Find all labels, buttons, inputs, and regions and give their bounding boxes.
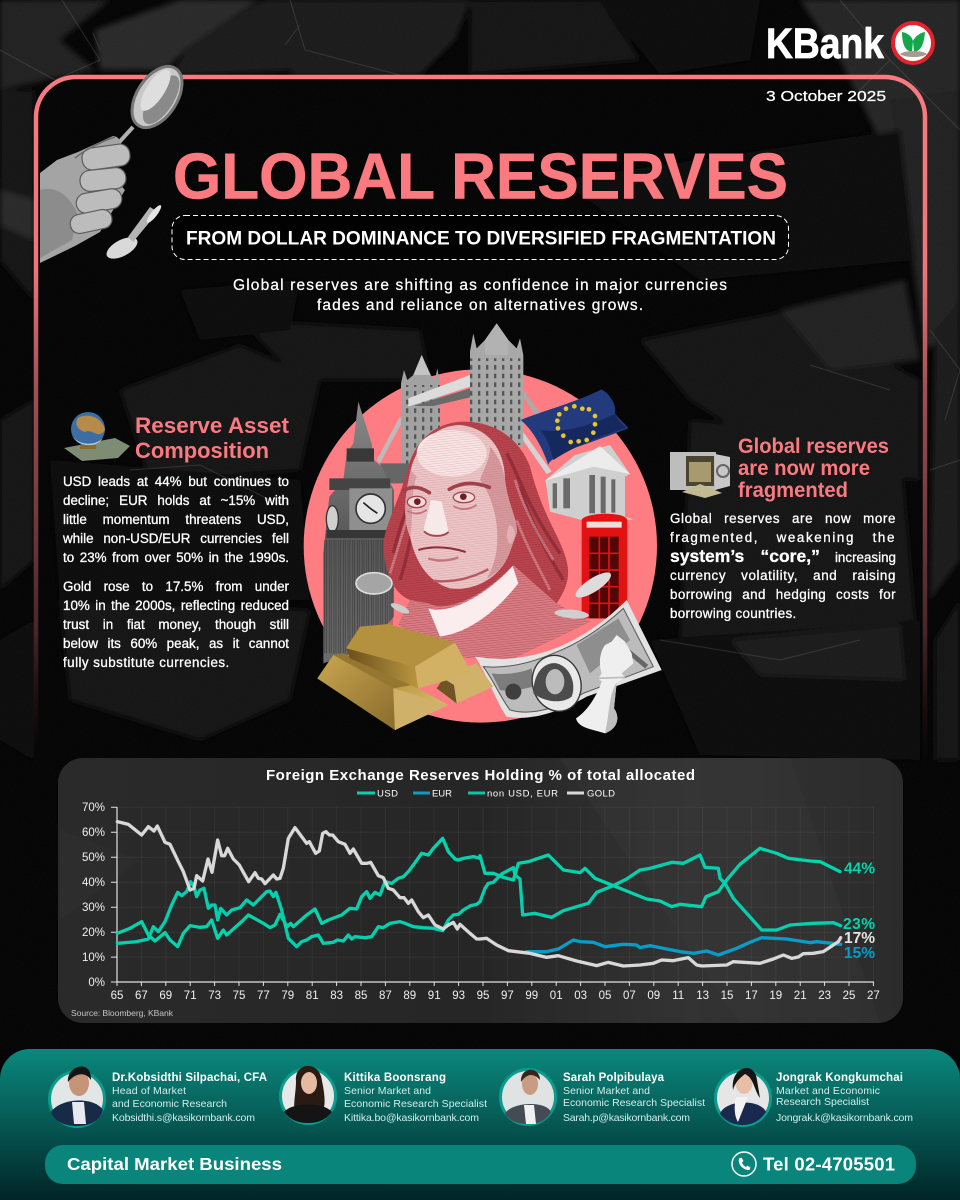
x-axis labels: 93 <box>452 990 465 1002</box>
legend <box>357 788 615 800</box>
x-axis labels: 11 <box>672 990 684 1002</box>
x-axis labels: 15 <box>721 990 733 1002</box>
heading: Reserve Asset Composition <box>135 413 290 463</box>
illustration: central collage <box>304 323 662 733</box>
text block: global reserves fragmented: currency volatility, and raising <box>670 568 896 582</box>
text: Jongrak: Market and Economic <box>776 1085 880 1097</box>
chess king piece <box>576 635 633 733</box>
heading: Global reserves are now more fragmented: fragmented <box>738 478 848 502</box>
x-axis labels: 23 <box>818 990 831 1002</box>
end labels: 17% <box>844 930 875 947</box>
portrait: Sarah <box>500 1070 556 1124</box>
date: 3 October 2025 <box>766 88 886 105</box>
text: Kittika: Economic Research Specialist <box>344 1098 487 1110</box>
x-axis labels: 97 <box>501 990 514 1002</box>
text: Kittika <box>344 1072 487 1124</box>
y-axis labels: 10% <box>82 952 105 964</box>
text: Kittika: Senior Market and <box>344 1085 431 1097</box>
x-axis labels: 13 <box>696 990 709 1002</box>
icon: KBank leaf emblem <box>893 23 933 63</box>
text block: global reserves fragmented: fragmented, weakening the <box>670 530 896 544</box>
portrait: Kittika <box>280 1066 336 1124</box>
intro text: Global reserves are shifting as confidence in major currencies <box>233 277 727 294</box>
title: GLOBAL RESERVES <box>173 140 788 212</box>
x-axis labels: 89 <box>403 990 416 1002</box>
y-axis labels: 0% <box>88 977 105 989</box>
contact bar <box>45 1145 916 1184</box>
heading: Reserve Asset Composition: Reserve Asset <box>135 413 290 438</box>
y-axis labels: 70% <box>82 802 105 814</box>
Big Ben <box>323 402 394 663</box>
x-axis labels: 19 <box>769 990 782 1002</box>
legend: GOLD <box>587 788 615 800</box>
x-axis labels: 03 <box>574 990 587 1002</box>
text: Kobsidthi: Head of Market <box>112 1085 186 1097</box>
chart grid and axes <box>111 807 874 986</box>
x-axis labels: 65 <box>111 990 123 1002</box>
portrait: Kobsidthi <box>50 1067 104 1126</box>
source note: Source: Bloomberg, KBank <box>71 1008 174 1018</box>
x-axis labels: 95 <box>477 990 489 1002</box>
icon: globe on banknotes <box>64 412 130 461</box>
text: Kittika: Kittika.bo@kasikornbank.com <box>344 1112 479 1124</box>
text block: global reserves fragmented <box>670 510 896 622</box>
x-axis labels: 99 <box>525 990 538 1002</box>
text: Jongrak: Jongrak Kongkumchai <box>776 1072 903 1084</box>
contact: Kittika Boonsrang <box>280 1066 487 1124</box>
end labels: 44% <box>844 860 875 878</box>
x-axis labels <box>111 990 880 1002</box>
gold bars <box>317 624 493 730</box>
text: Jongrak: Jongrak.k@kasikornbank.com <box>776 1112 913 1124</box>
heading: Global reserves are now more fragmented <box>738 434 889 502</box>
text: Kittika: Kittika Boonsrang <box>344 1072 446 1084</box>
x-axis labels: 75 <box>233 990 245 1002</box>
illustration: hand holding magnifying glass <box>40 58 192 263</box>
text block: reserve asset composition: fully substitute currencies. <box>63 654 230 670</box>
contact bar: Capital Market Business <box>67 1154 282 1174</box>
intro text <box>233 277 727 314</box>
x-axis labels: 17 <box>745 990 758 1002</box>
text block: global reserves fragmented: system’s “core,” increasing <box>670 546 896 566</box>
contact bar: Tel 02-4705501 <box>763 1154 895 1174</box>
logo: KBank: KBank <box>766 20 884 68</box>
text block: global reserves fragmented: borrowing countries. <box>670 606 797 620</box>
text: Jongrak: Research Specialist <box>776 1096 869 1108</box>
y-axis labels: 60% <box>82 827 105 839</box>
text block: reserve asset composition <box>62 474 290 670</box>
x-axis labels: 91 <box>428 990 441 1002</box>
x-axis labels: 67 <box>135 990 148 1002</box>
panel: chart <box>58 758 903 1023</box>
legend: EUR <box>432 788 452 800</box>
x-axis labels: 27 <box>867 990 880 1002</box>
text: Jongrak <box>776 1072 913 1124</box>
text: Sarah: Sarah.p@kasikornbank.com <box>563 1112 690 1124</box>
subtitle in dashed box <box>172 216 788 260</box>
x-axis labels: 73 <box>208 990 221 1002</box>
dollar bill <box>475 600 662 718</box>
x-axis labels: 01 <box>550 990 563 1002</box>
y-axis labels: 20% <box>82 927 105 939</box>
icon: falling coin <box>103 203 163 263</box>
text block: reserve asset composition: while non-USD/EUR currencies fell <box>63 530 289 546</box>
coins <box>356 568 614 620</box>
contact: Sarah Polpibulaya <box>500 1070 705 1124</box>
text block: reserve asset composition: decline; EUR holds at ~15% with <box>63 492 289 508</box>
icon: magnifying glass lens <box>122 58 192 136</box>
x-axis labels: 21 <box>794 990 807 1002</box>
EU flag <box>521 389 628 465</box>
subtitle in dashed box: FROM DOLLAR DOMINANCE TO DIVERSIFIED FRAGMENTATION <box>186 228 776 250</box>
red telephone box <box>582 514 627 618</box>
contact: Dr.Kobsidthi Silpachai <box>50 1067 267 1126</box>
x-axis labels: 69 <box>159 990 172 1002</box>
text block: global reserves fragmented: borrowing and hedging costs for <box>670 586 896 602</box>
text: Kobsidthi: Kobsidthi.s@kasikornbank.com <box>112 1112 255 1124</box>
text block: reserve asset composition: to 23% from over 50% in the 1990s. <box>63 550 289 564</box>
y-axis labels <box>82 802 105 989</box>
text: Kobsidthi: Dr.Kobsidthi Silpachai, CFA <box>112 1072 267 1084</box>
heading: Reserve Asset Composition: Composition <box>135 438 269 463</box>
frame: fading rounded border <box>36 77 925 770</box>
Tower Bridge <box>377 323 552 483</box>
text: Sarah: Economic Research Specialist <box>563 1097 705 1109</box>
text: Sarah <box>563 1072 705 1124</box>
pink circle <box>304 369 657 723</box>
line: EUR <box>527 938 841 955</box>
x-axis labels: 85 <box>355 990 367 1002</box>
panel: footer <box>0 1049 960 1200</box>
contact: Jongrak Kongkumchai <box>716 1068 913 1126</box>
x-axis labels: 83 <box>330 990 343 1002</box>
portrait: Jongrak <box>716 1068 770 1126</box>
text block: global reserves fragmented: Global reserves are now more <box>670 510 896 526</box>
line: non USD, EUR <box>117 855 841 947</box>
x-axis labels: 77 <box>257 990 270 1002</box>
legend: non USD, EUR <box>487 788 558 800</box>
x-axis labels: 81 <box>306 990 319 1002</box>
text block: reserve asset composition: Gold rose to 17.5% from under <box>63 578 289 594</box>
icon: open safe with cash <box>670 452 730 498</box>
text: Kobsidthi: and Economic Research <box>112 1098 227 1110</box>
end labels: 15% <box>844 945 875 962</box>
text block: reserve asset composition: USD leads at 44% but continues to <box>63 474 289 488</box>
x-axis labels: 05 <box>599 990 611 1002</box>
text: Kobsidthi <box>112 1072 267 1124</box>
x-axis labels: 25 <box>843 990 855 1002</box>
x-axis labels: 09 <box>647 990 660 1002</box>
x-axis labels: 07 <box>623 990 636 1002</box>
y-axis labels: 50% <box>82 852 105 864</box>
x-axis labels: 71 <box>184 990 197 1002</box>
text: Sarah: Sarah Polpibulaya <box>563 1072 665 1084</box>
chart title: Foreign Exchange Reserves Holding % of total allocated <box>266 767 695 784</box>
x-axis labels: 87 <box>379 990 392 1002</box>
y-axis labels: 40% <box>82 877 105 889</box>
text block: reserve asset composition: below its 60% peak, as it cannot <box>63 636 289 650</box>
legend: USD <box>377 788 398 800</box>
bank building <box>545 445 633 524</box>
end labels: 23% <box>843 916 875 933</box>
heading: Global reserves are now more fragmented: Global reserves <box>738 434 889 458</box>
line: GOLD <box>117 822 841 966</box>
icon: phone <box>732 1152 756 1176</box>
intro text: fades and reliance on alternatives grows. <box>317 297 643 314</box>
portrait: Benjamin Franklin engraving <box>380 420 593 663</box>
text block: reserve asset composition: little momentum threatens USD, <box>63 512 289 526</box>
y-axis labels: 30% <box>82 902 105 914</box>
text block: reserve asset composition: trust in fiat money, though still <box>63 616 289 632</box>
end labels <box>843 860 875 962</box>
text: Sarah: Senior Market and <box>563 1085 650 1097</box>
heading: Global reserves are now more fragmented: are now more <box>738 456 870 480</box>
text block: reserve asset composition: 10% in the 2000s, reflecting reduced <box>63 598 289 612</box>
line: USD <box>117 838 840 947</box>
x-axis labels: 79 <box>281 990 294 1002</box>
